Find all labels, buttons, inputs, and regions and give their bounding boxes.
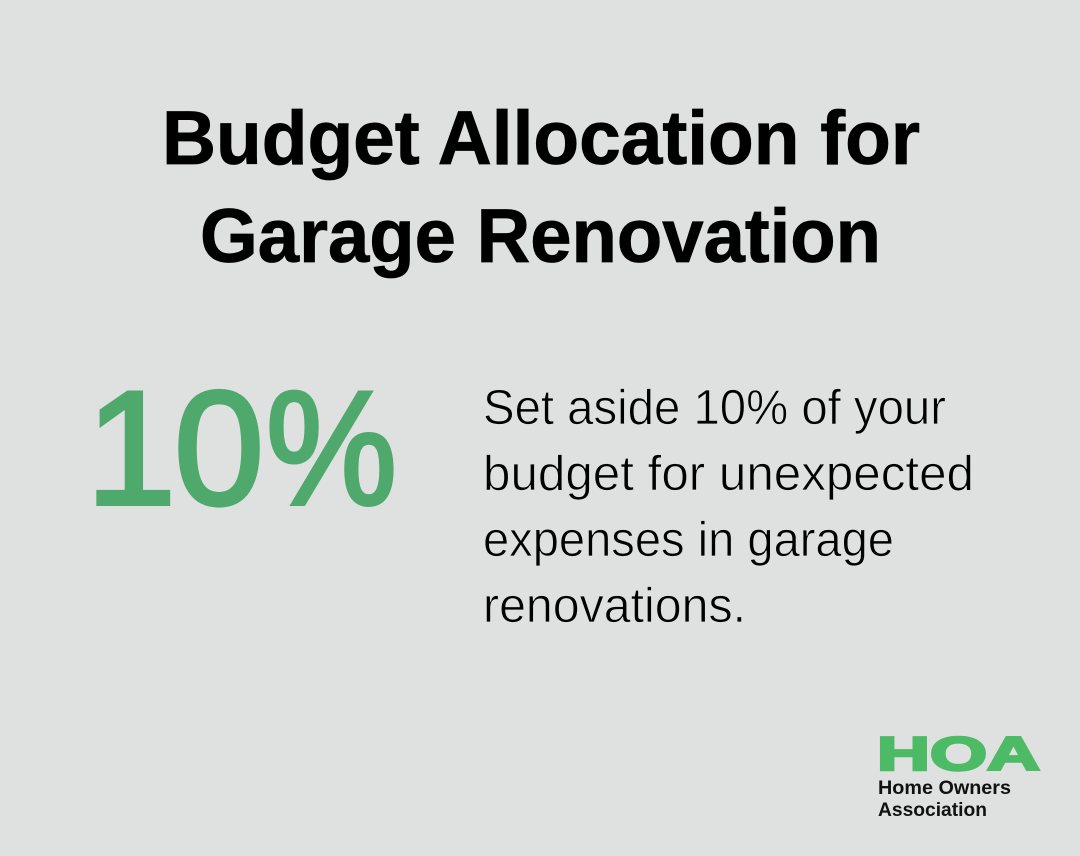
description text bbox=[483, 381, 974, 633]
title bbox=[162, 96, 920, 279]
logo: HOA Home Owners Association bbox=[877, 727, 1040, 821]
big statistic: 10%: 0 bbox=[174, 358, 264, 539]
big statistic: 10% bbox=[86, 358, 397, 539]
big statistic: 10%: % bbox=[266, 358, 397, 539]
description text: renovations. bbox=[483, 579, 746, 633]
logo wordmark: Home Owners bbox=[878, 778, 1011, 799]
description text: expenses in garage bbox=[483, 513, 894, 567]
description text: Set aside 10% of your bbox=[483, 381, 946, 435]
big statistic: 10%: 1 bbox=[86, 358, 176, 539]
logo wordmark bbox=[878, 778, 1011, 821]
logo mark: HOA: HOA bbox=[877, 727, 1040, 780]
title: Budget Allocation for bbox=[162, 96, 920, 181]
title: Garage Renovation bbox=[200, 194, 881, 279]
logo wordmark: Association bbox=[878, 800, 987, 821]
description text: budget for unexpected bbox=[483, 447, 974, 501]
